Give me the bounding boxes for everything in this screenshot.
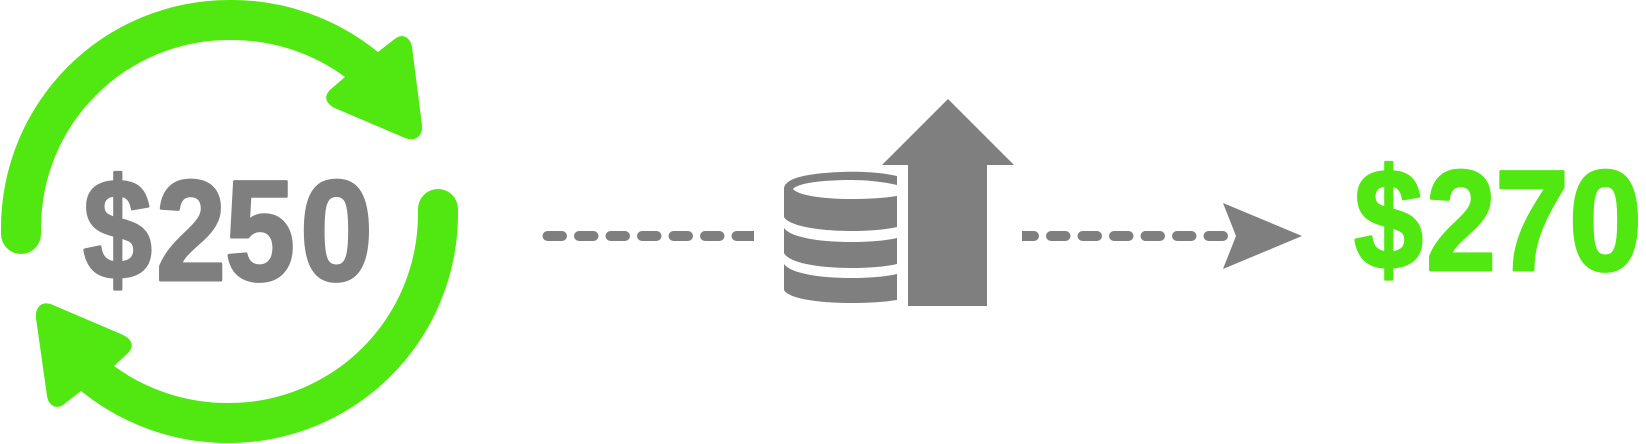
amount: $250: 0 xyxy=(300,152,373,311)
amount: $270: $ xyxy=(1354,140,1423,300)
bottom arrow xyxy=(36,189,458,443)
top arrow xyxy=(1,0,422,254)
amount: $270: 2 xyxy=(1426,142,1496,301)
amount: $270: 7 xyxy=(1495,142,1569,301)
dashed line: left xyxy=(542,231,754,241)
amount: $270 xyxy=(1354,140,1642,301)
icon: circular arrows xyxy=(1,0,458,443)
amount: $250 xyxy=(83,150,373,311)
amount: $250: 2 xyxy=(156,152,226,311)
arrowhead xyxy=(1223,203,1302,269)
dashed line: right xyxy=(1022,231,1228,241)
icon: coin stack with up arrow xyxy=(784,99,1014,306)
amount: $250: $ xyxy=(83,150,152,310)
coin stack xyxy=(784,172,897,231)
amount: $250: 5 xyxy=(225,152,295,311)
up arrow xyxy=(882,99,1014,306)
